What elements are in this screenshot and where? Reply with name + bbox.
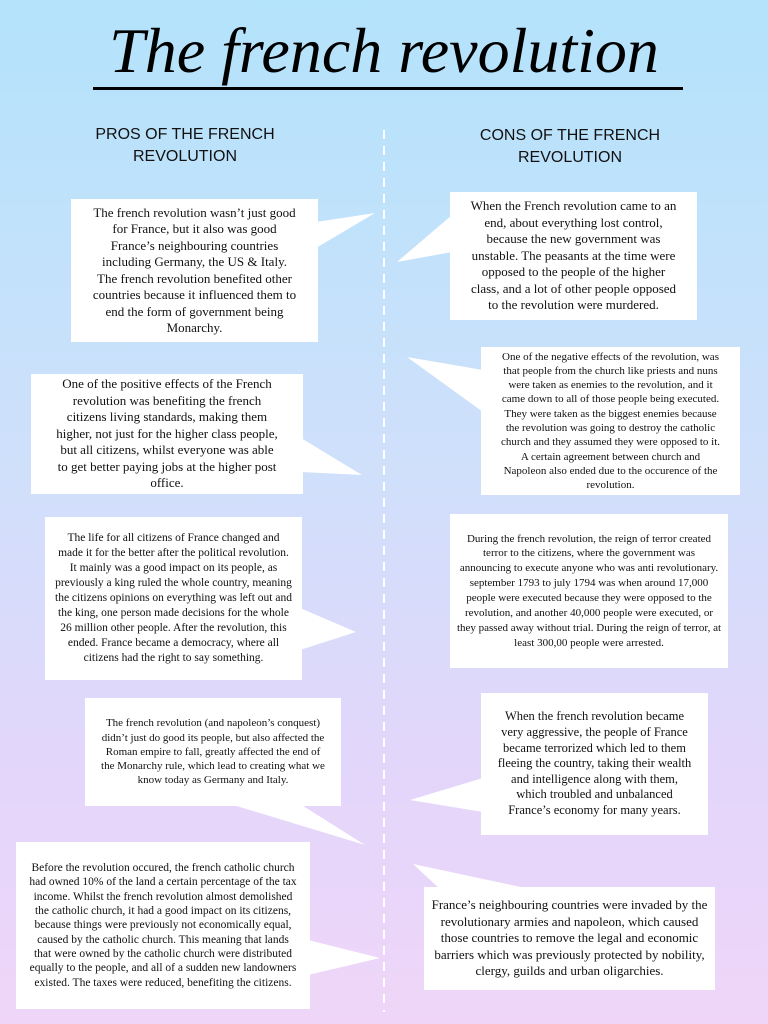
pro box 5: Before the revolution occured, the french catholic church had owned 10% of the land a certain percentage of the tax income. Whilst the french revolution almost demolished the catholic church, it had a good impact on its citizens, because things were previously not economically equal, caused by the catholic church. This meaning that lands that were owned by the catholic church were distributed equally to the people, and all of a sudden new landowners existed. The taxes were reduced, benefiting the citizens. xyxy=(29,862,297,989)
pro box 1: The french revolution wasn’t just good for France, but it also was good France’s neighbouring countries including Germany, the US & Italy. The french revolution benefited other countries because it influenced them to end the form of government being Monarchy. xyxy=(93,204,296,335)
heading: pros: PROS OF THE FRENCH REVOLUTION xyxy=(95,126,275,165)
con box 5: France’s neighbouring countries were invaded by the revolutionary armies and napoleon, which caused those countries to remove the legal and economic barriers which was previously protected by nobility, clergy, guilds and urban oligarchies. xyxy=(432,897,707,978)
pro box 2: One of the positive effects of the French revolution was benefiting the french citizens living standards, making them higher, not just for the higher class people, but all citizens, whilst everyone was able to get better paying jobs at the higher post office. xyxy=(56,376,278,490)
con box 4: When the french revolution became very aggressive, the people of France became terrorized which led to them fleeing the country, taking their wealth and intelligence along with them, which troubled and unbalanced France’s economy for many years. xyxy=(498,709,691,817)
title: The french revolution xyxy=(109,15,659,86)
title underline xyxy=(93,87,683,90)
pro box 5 xyxy=(16,842,310,1009)
pro box 4 xyxy=(85,698,341,806)
heading: cons: CONS OF THE FRENCH REVOLUTION xyxy=(480,127,660,166)
pro box 4: The french revolution (and napoleon’s conquest) didn’t just do good its people, but also affected the Roman empire to fall, greatly affected the end of the Monarchy rule, which lead to creating what we know today as Germany and Italy. xyxy=(101,717,325,786)
con box 1: When the French revolution came to an end, about everything lost control, because the new government was unstable. The peasants at the time were opposed to the people of the higher class, and a lot of other people opposed to the revolution were murdered. xyxy=(471,198,676,312)
pro box 3: The life for all citizens of France changed and made it for the better after the political revolution. It mainly was a good impact on its people, as previously a king ruled the whole country, meaning the citizens opinions on everything was left out and the king, one person made decisions for the whole 26 million other people. After the revolution, this ended. France became a democracy, where all citizens had the right to say something. xyxy=(55,532,292,664)
con box 4 xyxy=(481,693,708,835)
con box 2: One of the negative effects of the revolution, was that people from the church like priests and nuns were taken as enemies to the revolution, and it came down to all of those people being executed. They were taken as the biggest enemies because the revolution was going to destroy the catholic church and they assumed they were opposed to it. A certain agreement between church and Napoleon also ended due to the occurence of the revolution. xyxy=(501,351,720,491)
con box 3: During the french revolution, the reign of terror created terror to the citizens, where the government was announcing to execute anyone who was anti revolutionary. september 1793 to july 1794 was when around 17,000 people were executed because they were opposed to the revolution, and another 40,000 people were executed, or they passed away without trial. During the reign of terror, at least 300,00 people were arrested. xyxy=(457,533,721,649)
